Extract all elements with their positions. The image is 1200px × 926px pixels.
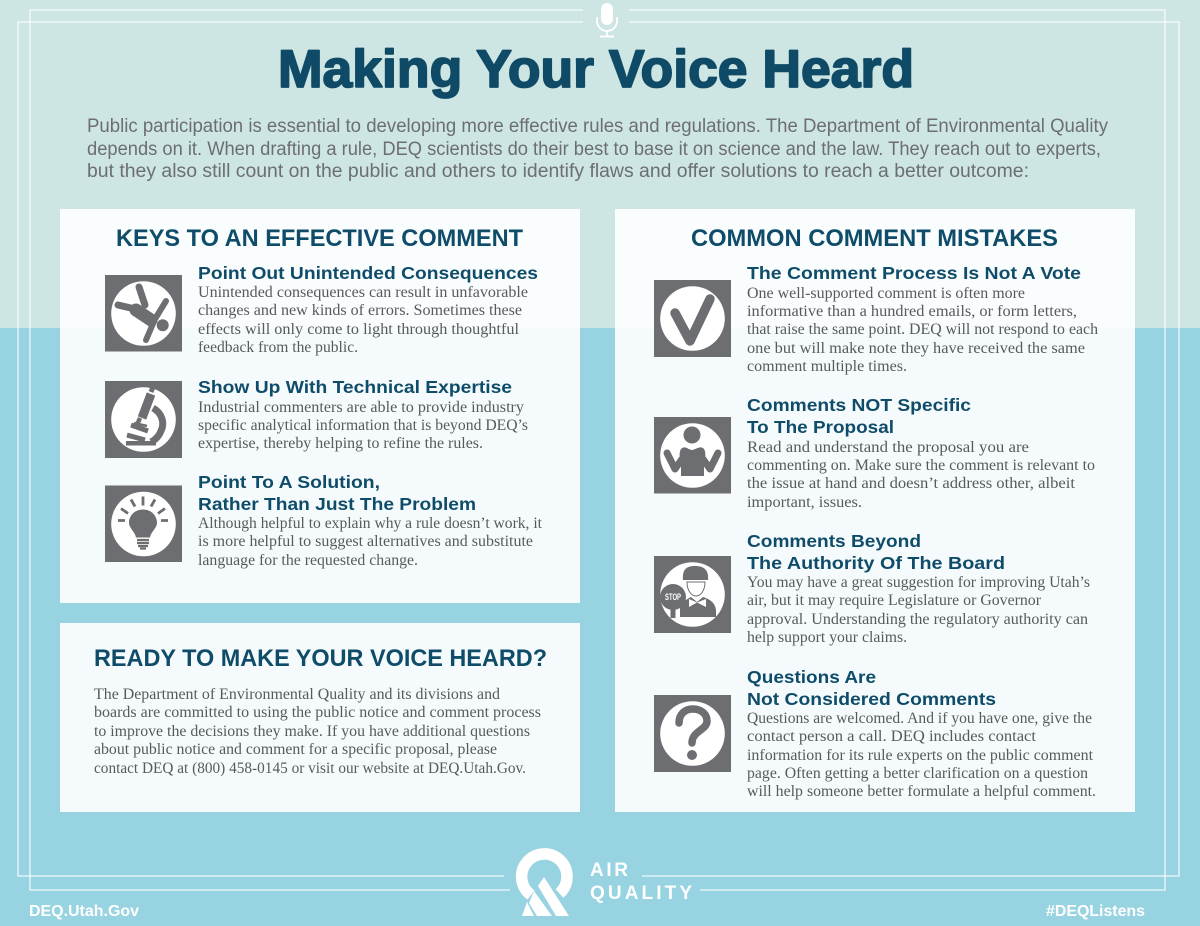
text: not specific: Comments NOT Specific bbox=[747, 395, 971, 415]
text: unintended consequences: Point Out Unintended Consequences bbox=[198, 263, 538, 283]
text: contact information bbox=[94, 686, 541, 777]
icon: microphone bbox=[597, 3, 617, 36]
text: unintended consequences: Unintended consequences can result in unfavorable bbox=[198, 284, 528, 301]
text: questions: page. Often getting a better clarification on a question bbox=[747, 765, 1088, 782]
text: questions: Questions are welcomed. And if you have one, give the bbox=[747, 710, 1092, 727]
text: unintended consequences: feedback from the public. bbox=[198, 339, 358, 356]
text: questions: contact person a call. DEQ includes contact bbox=[747, 728, 1037, 745]
text: questions bbox=[747, 667, 1096, 800]
heading: mistakes: COMMON COMMENT MISTAKES bbox=[691, 225, 1058, 252]
logo: air quality bbox=[522, 854, 692, 916]
icon: light bulb bbox=[105, 486, 182, 562]
text: contact information: The Department of Environmental Quality and its divisions and bbox=[94, 686, 500, 703]
text: point to a solution: Although helpful to explain why a rule doesn’t work, it bbox=[198, 515, 543, 532]
text: point to a solution bbox=[198, 472, 543, 569]
text: point to a solution: language for the requested change. bbox=[198, 552, 418, 569]
text: technical expertise: Industrial commenters are able to provide industry bbox=[198, 399, 524, 416]
icon: falling person bbox=[105, 275, 182, 352]
text: beyond authority: help support your claims. bbox=[747, 629, 907, 646]
logo text: AIR bbox=[590, 860, 628, 881]
text: point to a solution: Rather Than Just The Problem bbox=[198, 494, 476, 514]
icon: stop sign attendant bbox=[654, 556, 731, 633]
text: unintended consequences bbox=[198, 263, 538, 356]
text: contact information: about public notice and comment for a specific proposal, please bbox=[94, 741, 497, 758]
icon: check mark bbox=[654, 280, 731, 357]
text: not specific: important, issues. bbox=[747, 494, 862, 511]
icon: microscope bbox=[105, 381, 182, 458]
icon: question mark bbox=[654, 695, 731, 772]
text: unintended consequences: changes and new kinds of errors. Sometimes these bbox=[198, 302, 522, 319]
text: beyond authority: The Authority Of The Board bbox=[747, 553, 1005, 573]
heading: ready: READY TO MAKE YOUR VOICE HEARD? bbox=[94, 645, 547, 672]
text: not specific: the issue at hand and doesn’t address other, albeit bbox=[747, 475, 1076, 492]
intro paragraph: depends on it. When drafting a rule, DEQ scientists do their best to base it on science and the law. They reach out to experts, bbox=[87, 139, 1101, 160]
text: not a vote: One well-supported comment is often more bbox=[747, 285, 1025, 302]
intro paragraph: Public participation is essential to developing more effective rules and regulations. The Department of Environmental Quality bbox=[87, 116, 1108, 137]
text: not a vote: The Comment Process Is Not A Vote bbox=[747, 263, 1081, 283]
text: technical expertise: expertise, thereby helping to refine the rules. bbox=[198, 435, 483, 452]
text: questions: will help someone better formulate a helpful comment. bbox=[747, 783, 1096, 800]
text: technical expertise bbox=[198, 377, 528, 452]
title: Making Your Voice Heard bbox=[278, 40, 914, 99]
text: not a vote: comment multiple times. bbox=[747, 358, 907, 375]
icon: shrugging person bbox=[654, 417, 731, 494]
text: contact information: boards are committed to using the public notice and comment process bbox=[94, 704, 541, 721]
text: beyond authority: You may have a great suggestion for improving Utah’s bbox=[747, 574, 1090, 591]
text: questions: Not Considered Comments bbox=[747, 689, 996, 709]
logo mark bbox=[522, 854, 569, 916]
text: beyond authority: Comments Beyond bbox=[747, 531, 921, 551]
text: not a vote: one but will make note they have received the same bbox=[747, 340, 1085, 357]
text: beyond authority: air, but it may require Legislature or Governor bbox=[747, 592, 1042, 609]
intro paragraph bbox=[87, 116, 1108, 182]
text: technical expertise: Show Up With Technical Expertise bbox=[198, 377, 512, 397]
text: beyond authority bbox=[747, 531, 1090, 646]
text: contact information: contact DEQ at (800) 458-0145 or visit our website at DEQ.Utah.Gov. bbox=[94, 760, 526, 777]
text: technical expertise: specific analytical information that is beyond DEQ’s bbox=[198, 417, 528, 434]
text: questions: information for its rule experts on the public comment bbox=[747, 747, 1094, 764]
text: point to a solution: is more helpful to suggest alternatives and substitute bbox=[198, 533, 533, 550]
text: beyond authority: approval. Understanding the regulatory authority can bbox=[747, 611, 1088, 628]
text: contact information: to improve the decisions they make. If you have additional questions bbox=[94, 723, 530, 740]
text: not a vote: that raise the same point. DEQ will not respond to each bbox=[747, 321, 1098, 338]
panel: keys to an effective comment bbox=[60, 209, 580, 603]
text: not a vote bbox=[747, 263, 1098, 375]
text: not specific: To The Proposal bbox=[747, 417, 894, 437]
text: unintended consequences: effects will only come to light through thoughtful bbox=[198, 321, 520, 338]
text: point to a solution: Point To A Solution, bbox=[198, 472, 380, 492]
logo text bbox=[590, 860, 692, 904]
text: questions: Questions Are bbox=[747, 667, 876, 687]
panel: ready to make your voice heard bbox=[60, 623, 580, 812]
text: not specific: commenting on. Make sure the comment is relevant to bbox=[747, 457, 1095, 474]
footer: website: DEQ.Utah.Gov bbox=[29, 903, 139, 920]
logo text: QUALITY bbox=[590, 883, 692, 904]
footer: hashtag: #DEQListens bbox=[1046, 903, 1145, 920]
text: not specific bbox=[747, 395, 1095, 511]
text: not specific: Read and understand the proposal you are bbox=[747, 439, 1029, 456]
intro paragraph: but they also still count on the public and others to identify flaws and offer solutions to reach a better outcome: bbox=[87, 161, 1029, 182]
heading: keys: KEYS TO AN EFFECTIVE COMMENT bbox=[116, 225, 523, 252]
panel: common comment mistakes bbox=[615, 209, 1135, 812]
icon text: stop: STOP bbox=[665, 592, 681, 602]
text: not a vote: informative than a hundred emails, or form letters, bbox=[747, 303, 1077, 320]
